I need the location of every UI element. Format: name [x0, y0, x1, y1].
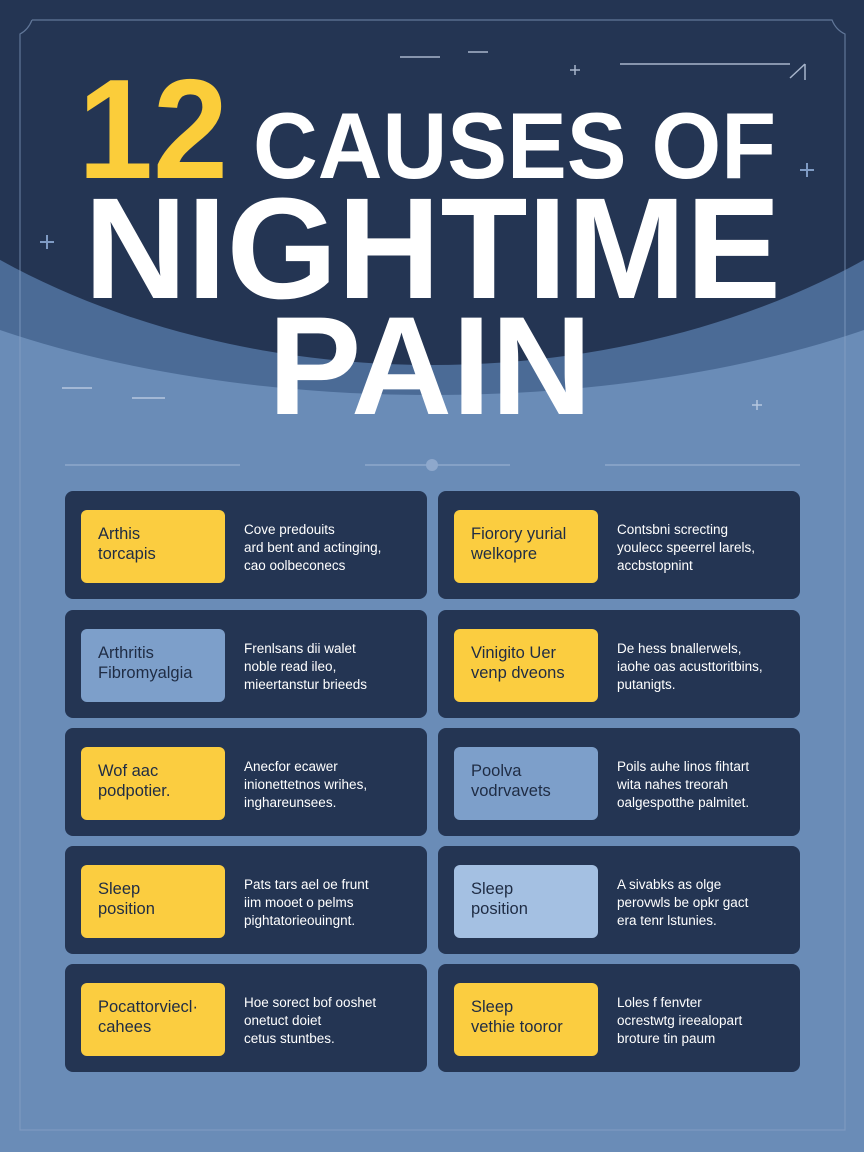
- card 6: Poolva: [471, 762, 521, 780]
- card 3: [65, 610, 427, 718]
- card 7: Sleep: [98, 880, 140, 898]
- card 6: [438, 728, 800, 836]
- card 1: ard bent and actinging,: [244, 540, 381, 555]
- card 5: Wof aac: [98, 762, 158, 780]
- title: [78, 50, 781, 430]
- card 4: putanigts.: [617, 677, 676, 692]
- card 3: Frenlsans dii walet: [244, 641, 356, 656]
- card 9: cahees: [98, 1018, 151, 1036]
- card 9: cetus stuntbes.: [244, 1031, 335, 1046]
- card 2: Fiorory yurial: [471, 525, 566, 543]
- card 5: podpotier.: [98, 782, 170, 800]
- card 2: accbstopnint: [617, 558, 693, 573]
- card 10: [438, 964, 800, 1072]
- card 3: mieertanstur brieeds: [244, 677, 367, 692]
- card 6: Poils auhe linos fihtart: [617, 759, 749, 774]
- card 7: position: [98, 900, 155, 918]
- card 4: Vinigito Uer: [471, 644, 556, 662]
- card 3: noble read ileo,: [244, 659, 336, 674]
- card 8: [438, 846, 800, 954]
- card 9: Pocattorviecl·: [98, 998, 198, 1016]
- card 3: Arthritis: [98, 644, 154, 662]
- card 8: Sleep: [471, 880, 513, 898]
- card 7: Pats tars ael oe frunt: [244, 877, 369, 892]
- card 8: era tenr lstunies.: [617, 913, 717, 928]
- card 4: De hess bnallerwels,: [617, 641, 742, 656]
- card 8: A sivabks as olge: [617, 877, 721, 892]
- card 5: [65, 728, 427, 836]
- card 2: welkopre: [471, 545, 537, 563]
- card 7: [65, 846, 427, 954]
- card 6: vodrvavets: [471, 782, 551, 800]
- title: 12: [78, 50, 228, 209]
- card 8: position: [471, 900, 528, 918]
- card 1: [65, 491, 427, 599]
- card 4: [438, 610, 800, 718]
- title: CAUSES OF: [253, 93, 776, 198]
- card 4: iaohe oas acusttoritbins,: [617, 659, 763, 674]
- card 2: [438, 491, 800, 599]
- card 6: wita nahes treorah: [617, 777, 728, 792]
- card 10: broture tin paum: [617, 1031, 715, 1046]
- card 9: Hoe sorect bof ooshet: [244, 995, 376, 1010]
- card 1: Arthis: [98, 525, 140, 543]
- card 7: iim mooet o pelms: [244, 895, 354, 910]
- card 1: cao oolbeconecs: [244, 558, 345, 573]
- title: NIGHTIME: [84, 168, 781, 329]
- card 2: Contsbni screcting: [617, 522, 728, 537]
- card 6: oalgespotthe palmitet.: [617, 795, 749, 810]
- card 5: inionettetnos wrihes,: [244, 777, 367, 792]
- card 10: vethie tooror: [471, 1018, 563, 1036]
- card 7: pightatorieouingnt.: [244, 913, 355, 928]
- card 9: [65, 964, 427, 1072]
- card 5: inghareunsees.: [244, 795, 336, 810]
- card 2: youlecc speerrel larels,: [617, 540, 755, 555]
- card 5: Anecfor ecawer: [244, 759, 338, 774]
- card 1: Cove predouits: [244, 522, 335, 537]
- card 8: perovwls be opkr gact: [617, 895, 748, 910]
- card 10: Sleep: [471, 998, 513, 1016]
- card 10: ocrestwtg ireealopart: [617, 1013, 742, 1028]
- card 3: Fibromyalgia: [98, 664, 192, 682]
- card 4: venp dveons: [471, 664, 565, 682]
- card 10: Loles f fenvter: [617, 995, 702, 1010]
- card 1: torcapis: [98, 545, 156, 563]
- card 9: onetuct doiet: [244, 1013, 321, 1028]
